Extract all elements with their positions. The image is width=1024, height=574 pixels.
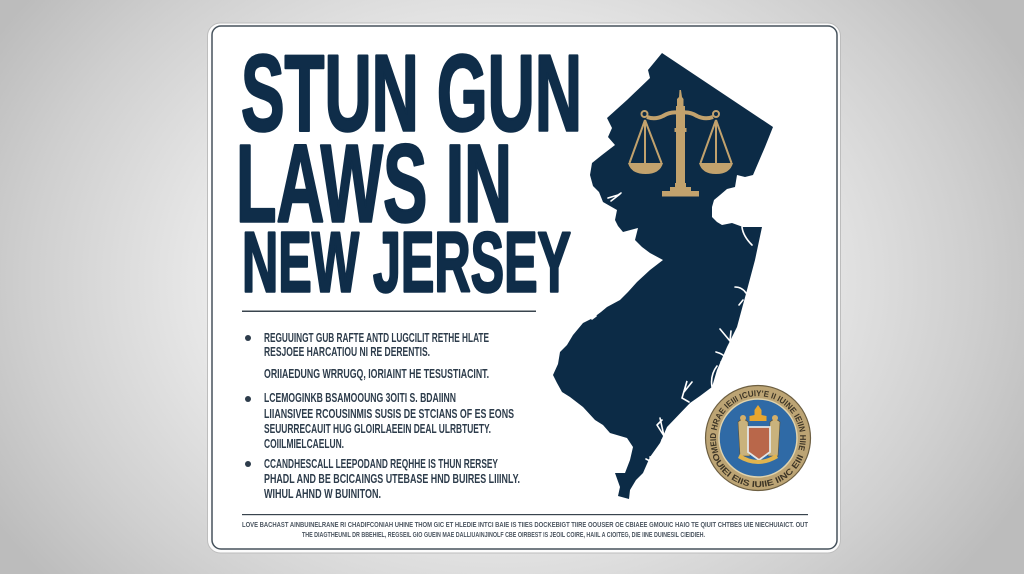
map: coastline details — [592, 193, 752, 462]
bullet item 1 — [245, 330, 489, 381]
bullet item 1: REGUUINGT GUB RAFTE ANTD LUGCILIT RETHE HLATE — [264, 330, 489, 345]
seal: state seal — [704, 384, 812, 492]
bullet list — [245, 330, 520, 501]
seal: coat of arms — [738, 405, 780, 464]
bullet item 3: WIHUL AHND W BUINITON. — [264, 486, 381, 501]
title — [236, 32, 582, 310]
icon: scales of justice — [628, 90, 733, 196]
bullet item 1: ORIIAEDUNG WRRUGQ, IORIAINT HE TESUSTIACINT. — [264, 366, 489, 381]
seal: ring text — [710, 390, 806, 488]
seal: ring text: MEID HRAE IEIII ICUIY'E II IUINE IEIIN HIIE — [710, 390, 806, 454]
title: NEW JERSEY — [242, 216, 571, 310]
bullet item 3: PHADL AND BE BCICAINGS UTEBASE HND BUIRES LIIINLY. — [264, 471, 520, 486]
panel: notice card — [208, 23, 840, 553]
map: New Jersey silhouette — [553, 53, 773, 499]
title: STUN GUN — [241, 32, 582, 154]
bullet item 2: SEUURRECAUIT HUG GLOIRLAEEIN DEAL ULRBTUETY. — [264, 421, 491, 436]
bullet item 1: RESJOEE HARCATIOU NI RE DERENTIS. — [264, 344, 430, 359]
fine print: LOVE BACHAST AINBUINELRANE RI CHADIFCONIAH UHINE THOM GIC ET HLEDIE INTCI BAIE IS TIIES DOCKEBIGT TIIRE OOUSER OE CBIAEE GMOUIC HAIO TE QIUIT CHTBES UIE NIECHUIAICT. OUT — [242, 522, 809, 529]
title: LAWS IN — [236, 122, 512, 246]
bullet item 3: CCANDHESCALL LEEPODAND REQHHE IS THUN RERSEY — [264, 456, 498, 471]
seal: ring text: OUIEI EIIS IUIIE IINC EIII — [713, 454, 804, 488]
fine print: THE DIAGTHEUNIL DR BBEHIEL, REGSEIL GIO GUEIN MAE DALLIUAINJINOLF CBE OIRBEST IS JEOIL COIRE, HAIIL A CIOITEG, DIE IINE DUINESIL CIEIDIEH. — [302, 532, 705, 539]
bullet item 2: COIILMIELCAELUN. — [264, 436, 344, 451]
footer divider — [242, 514, 808, 515]
bullet item 3 — [245, 456, 520, 501]
fine print — [242, 522, 809, 539]
bullet item 2: LIIANSIVEE RCOUSINMIS SUSIS DE STCIANS OF ES EONS — [264, 406, 514, 421]
bullet item 2: LCEMOGINKB BSAMOOUNG 3OITI S. BDAIINN — [264, 390, 456, 405]
bullet item 2 — [245, 390, 514, 451]
title divider — [242, 310, 536, 312]
